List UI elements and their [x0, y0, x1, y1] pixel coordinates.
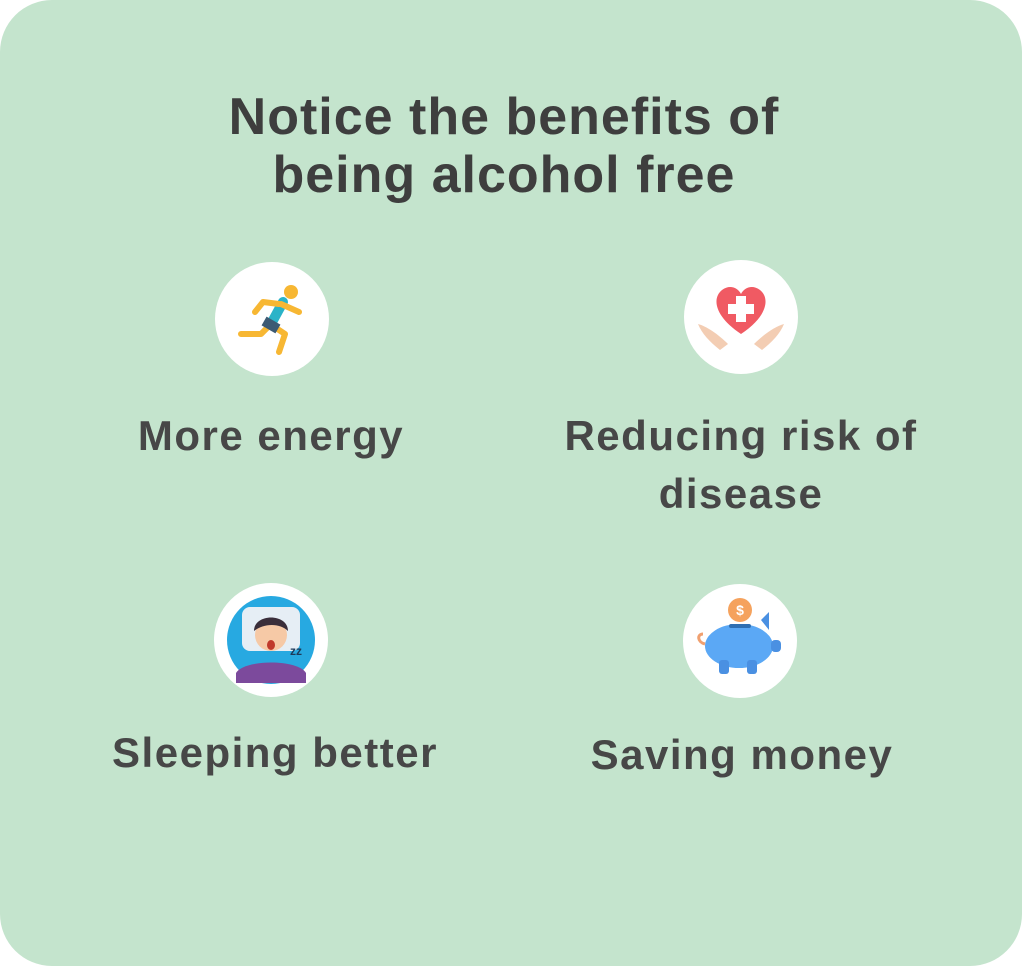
icon: piggy bank	[683, 584, 797, 698]
icon: runner	[215, 262, 329, 376]
icon: sleeping person: zz	[290, 644, 302, 658]
icon: piggy bank: $	[736, 602, 744, 618]
title: Notice the benefits of	[229, 88, 779, 146]
text: reducing risk of disease	[564, 412, 918, 517]
text: saving money: Saving money	[591, 731, 893, 778]
text: reducing risk of disease: Reducing risk of	[564, 412, 918, 459]
icon: heart with hands	[684, 260, 798, 374]
text: more energy: More energy	[138, 412, 404, 459]
title	[229, 88, 779, 204]
text: sleeping better: Sleeping better	[112, 729, 438, 776]
icon: sleeping person	[214, 583, 328, 697]
title: being alcohol free	[272, 146, 735, 204]
text: reducing risk of disease: disease	[659, 470, 823, 517]
